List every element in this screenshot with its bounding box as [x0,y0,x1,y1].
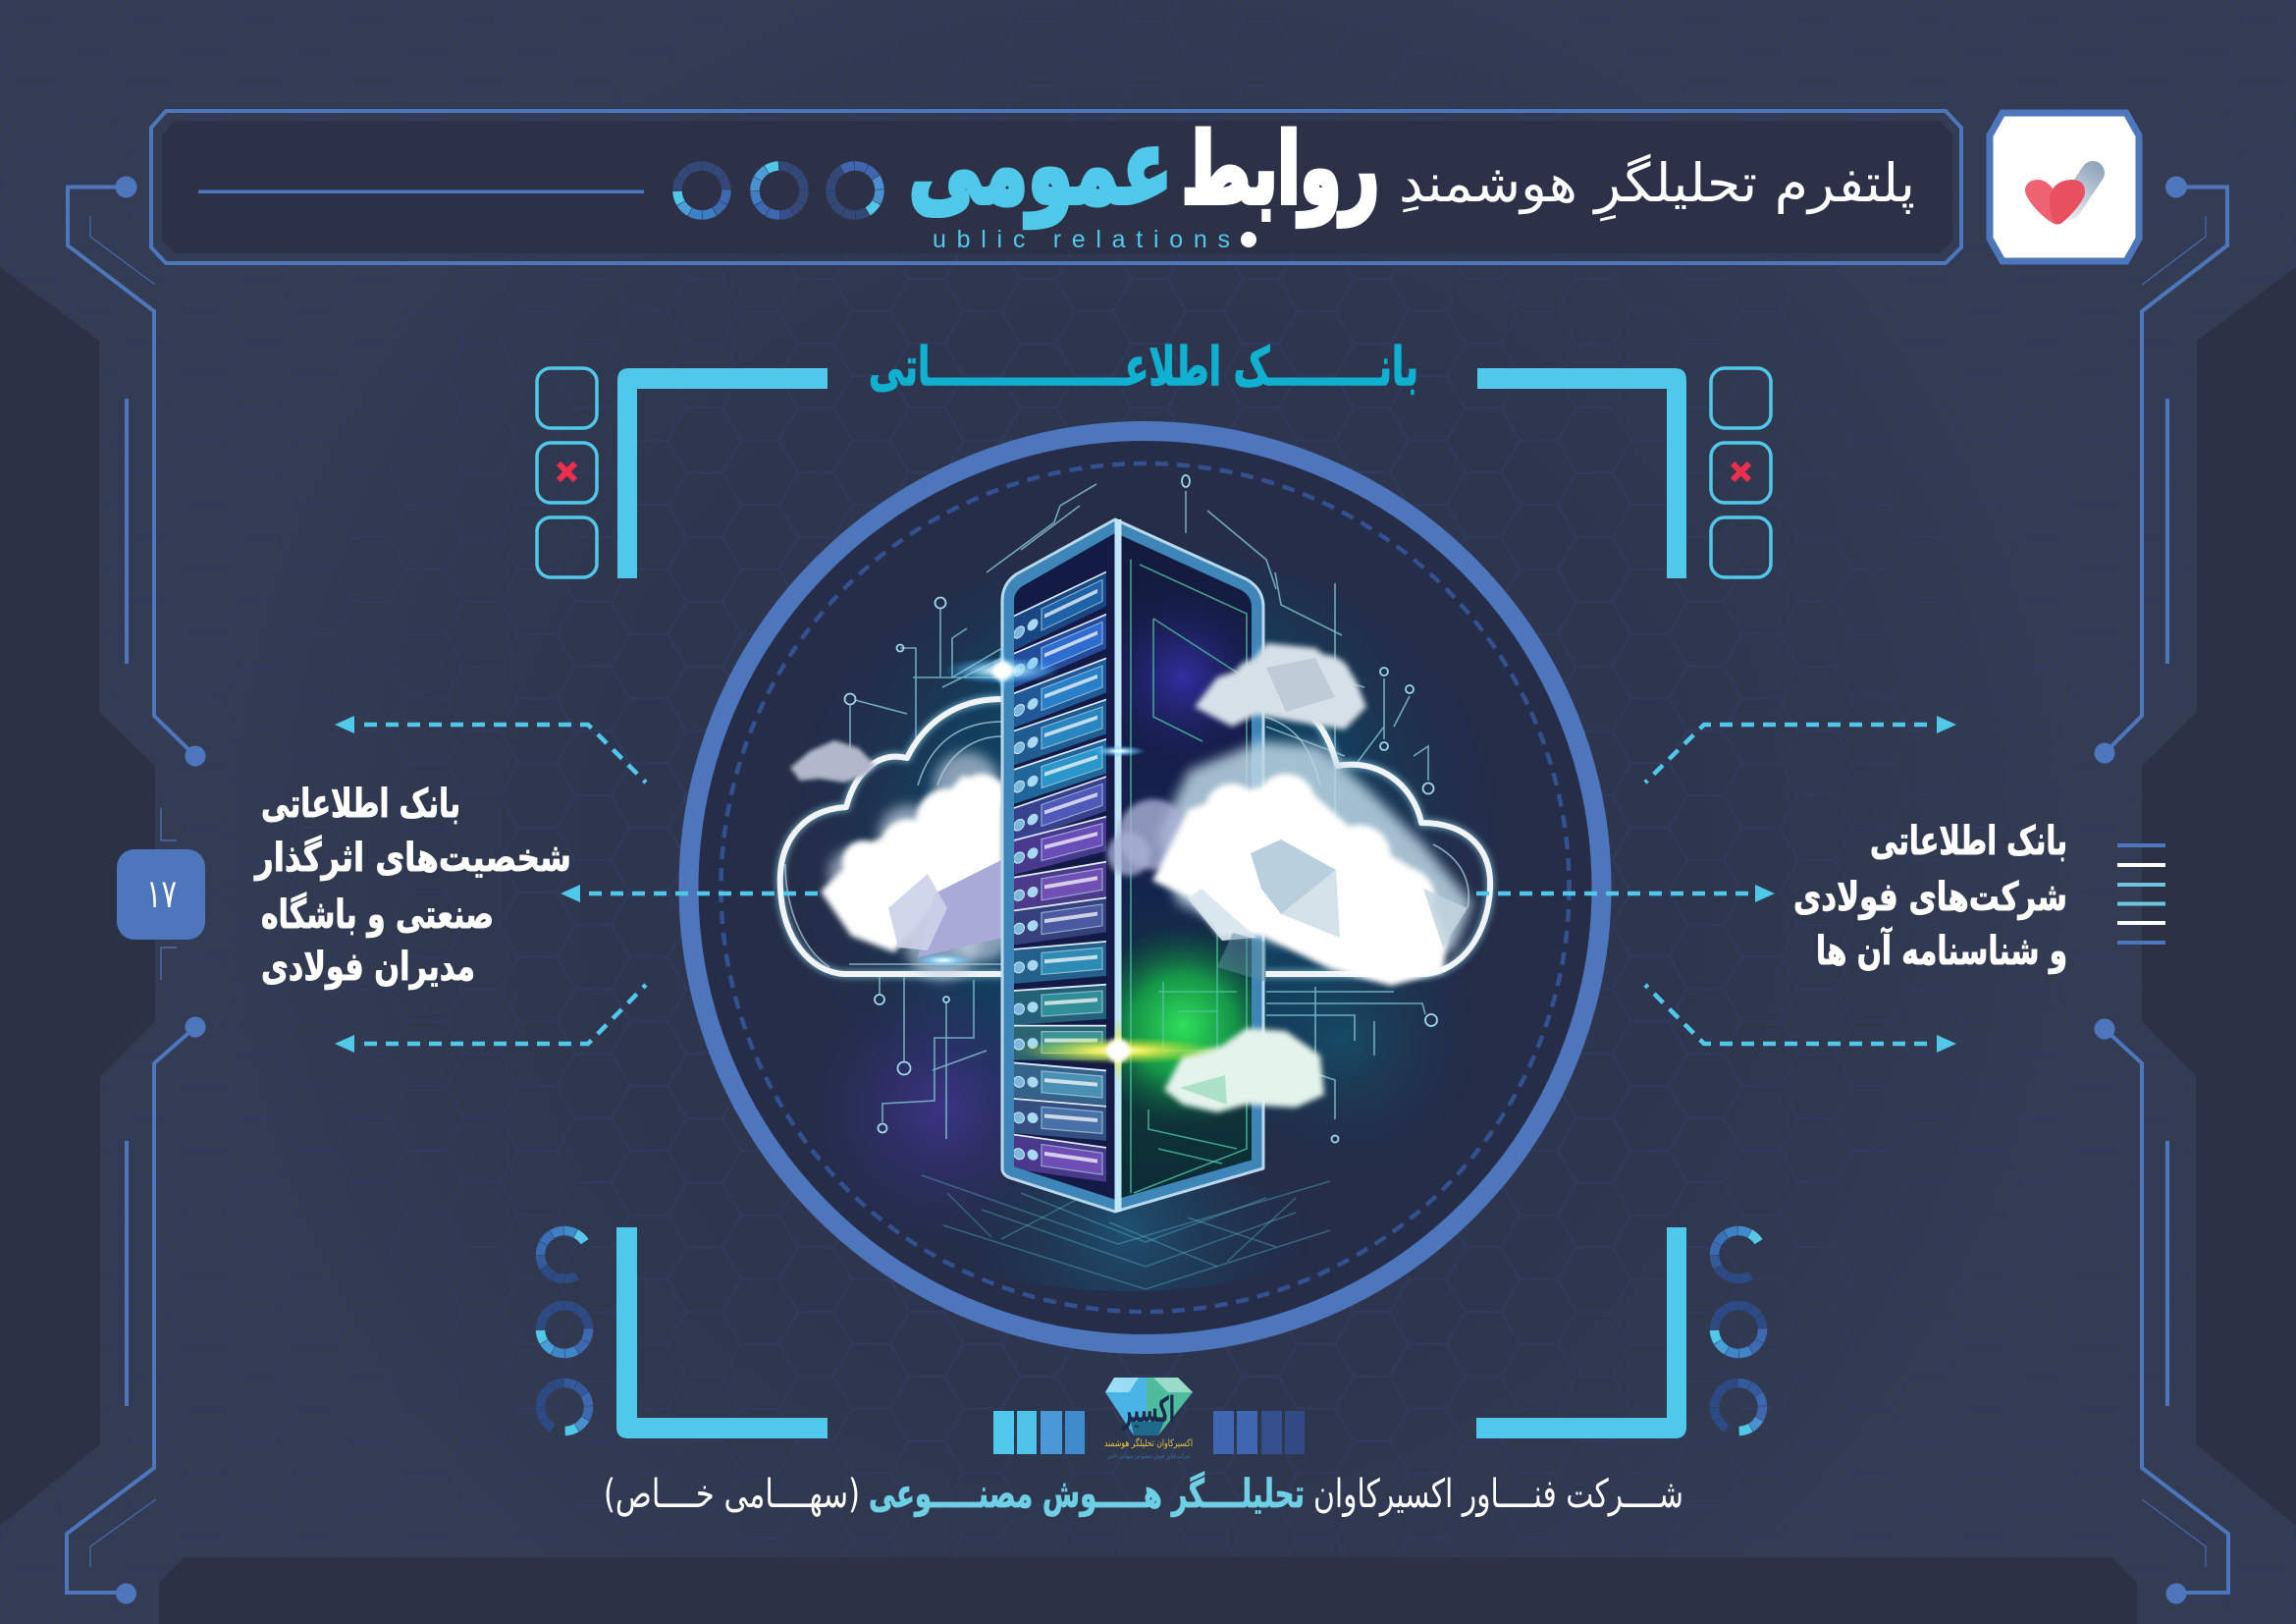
cloud top right [1195,643,1366,730]
section title: بانـــــــــک اطلاعــــــــــــــــاتی [869,336,1418,398]
header rule line [198,190,644,193]
central circle illustration [689,431,1602,1344]
footer bars: left [993,1411,1085,1454]
logo latin tagline: ublic relations [933,226,1230,253]
heart left lobe [2025,180,2061,224]
text block: left [253,782,571,990]
glows behind server [781,550,1508,1291]
small cloud left [790,740,876,783]
header inner panel [162,121,1952,253]
bottom cloud facet [1180,1075,1227,1105]
page number badge: ۱۷ [146,872,177,917]
cloud outline back [780,693,1490,974]
footer company line: تحلیلــــگر هـــــوش مصنـــــوعی [869,1471,1305,1517]
circuit traces [850,484,1428,1139]
logo word: public (cyan): عمومی [909,107,1172,227]
left cloud pale haze [828,752,1011,980]
circle fill and outer ring [689,431,1602,1344]
right cloud facets [1188,889,1256,941]
left cloud lavender facets [918,859,1003,957]
text block: right [1793,819,2067,974]
right cloud white core [1152,774,1448,986]
light flare: cloud [914,953,973,967]
right face green glow [1099,923,1266,1129]
server slots [1011,572,1106,1182]
footer company line [604,1471,1683,1517]
text block: right: شرکت‌های فولادی [1793,875,2067,920]
bottom progress rings: right column [1714,1231,1763,1432]
status boxes: right column [1711,368,1771,577]
header title: پلتفرم تحلیلگرِ هوشمندِ [1399,152,1915,222]
dashed inner ring [721,463,1569,1312]
top cloud mass [1195,643,1366,730]
dashed connectors: left [335,716,818,1053]
gem lower facets [1131,1422,1164,1435]
gem calligraphy: اکسیر [1121,1390,1175,1431]
footer bars: right [1213,1411,1305,1454]
light flare: blue [943,645,1061,696]
dashed connectors: right [1476,716,1956,1053]
text block: left: مدیران فولادی [261,945,475,990]
heart right lobe [2050,180,2085,224]
text block: left: شخصیت‌های اثرگذار [253,835,571,881]
gem left facets [1105,1378,1147,1435]
circuit line: left side [67,177,206,1604]
status boxes: left column [537,368,597,577]
decorative side ticks [2117,845,2165,943]
text block: left: صنعتی و باشگاه [261,892,494,938]
gem caption: اکسیرکاوان تحلیلگر هوشمند [1104,1437,1193,1449]
header progress rings [677,166,880,215]
logo dot [1241,232,1256,247]
bracket: bottom right [1476,1227,1686,1438]
footer company line: شــــرکت فنــــاور اکسیرکاوان [1313,1472,1683,1517]
bottom progress rings: left column [540,1231,589,1432]
cloud left body [821,752,1011,980]
bottom cloud mass [1164,1028,1324,1112]
left face [1002,519,1115,1212]
bracket: top left [617,368,828,578]
company gem logo [1104,1378,1193,1460]
bracket accents around badge [161,808,177,980]
light flare: yellow [1016,1017,1222,1084]
header frame [151,111,1961,263]
left cloud white core [821,774,1005,952]
cloud right body [1107,741,1472,986]
server floor grid [922,1175,1330,1289]
circuit nodes [844,475,1437,1143]
right face traces [1131,560,1247,1193]
footer company line: (سهــــامی خــــاص) [604,1472,860,1517]
gem sub caption: شرکت فناور هوش مصنوعی سهامی خاص [1107,1452,1191,1460]
bracket: bottom left [616,1227,828,1438]
right face violet glow [1099,574,1266,781]
circuit line: right side [2095,177,2228,1604]
tower frame [1002,519,1263,1212]
bracket: top right [1477,368,1686,578]
text block: left: بانک اطلاعاتی [261,782,460,827]
page number badge [117,849,205,940]
inner cloud echo lines [785,717,1468,967]
text block: right: و شناسنامه آن ها [1816,926,2067,974]
cloud bottom right [1164,1028,1324,1112]
text block: right: بانک اطلاعاتی [1870,819,2067,864]
right cloud lavender haze [1107,799,1189,876]
right cloud pale haze [1158,741,1472,952]
logo word: relations (white): روابط [1182,114,1379,227]
icon: heart check badge [1990,113,2139,261]
header panel [151,107,1961,263]
right face [1115,519,1263,1212]
server tower [1002,519,1266,1212]
light flare: mid spine [1092,745,1147,757]
check stroke pill [2069,173,2093,208]
top cloud facets [1266,658,1335,712]
gem right facets [1147,1378,1193,1435]
